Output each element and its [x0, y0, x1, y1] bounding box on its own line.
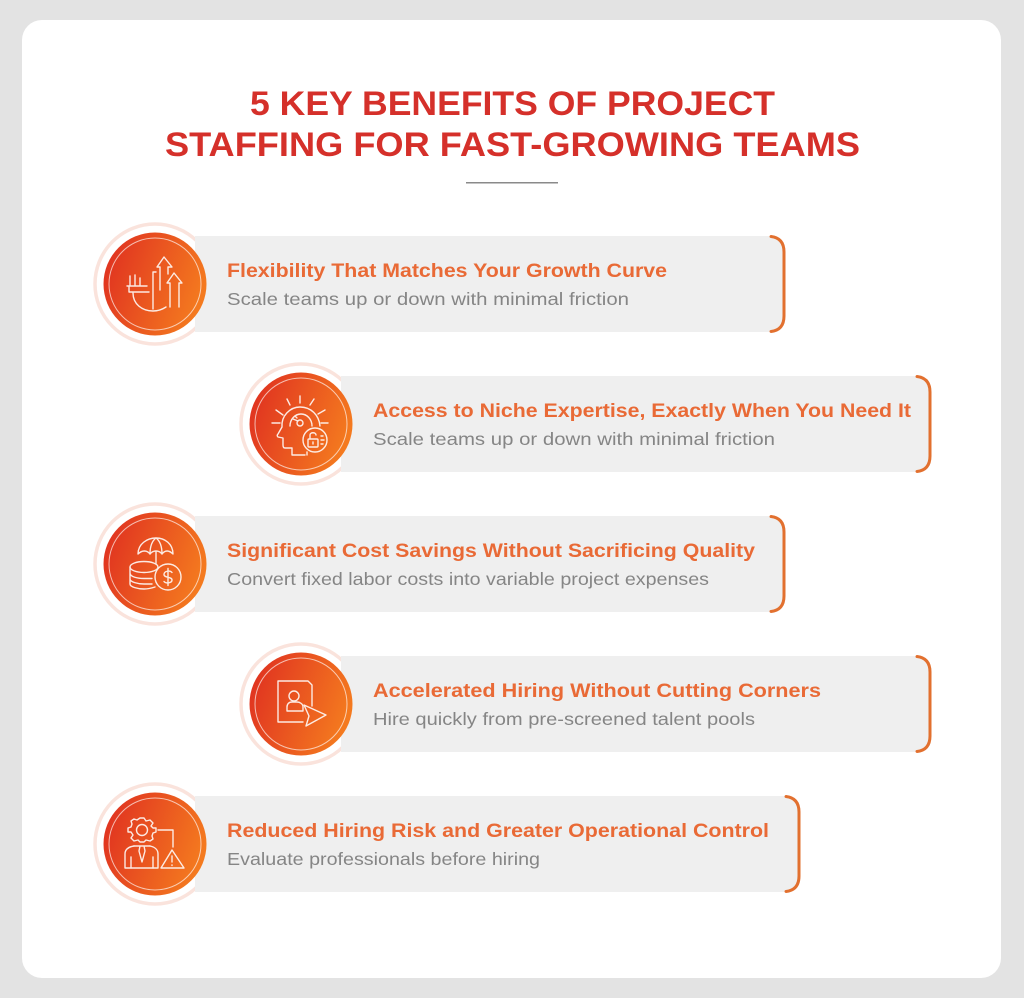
description: Convert fixed labor costs into variable project expenses: [227, 569, 709, 589]
description: Hire quickly from pre-screened talent pools: [373, 709, 755, 729]
panel: flexibility: [95, 224, 784, 344]
panel: accelerated hiring: [241, 644, 930, 764]
title: [165, 85, 860, 164]
description: Scale teams up or down with minimal friction: [373, 429, 775, 449]
heading: Accelerated Hiring Without Cutting Corners: [373, 681, 821, 702]
icon: growth arrows: [104, 232, 206, 336]
icon: umbrella and coins: [104, 512, 206, 616]
panel: reduced risk: [95, 784, 799, 904]
heading: Reduced Hiring Risk and Greater Operational Control: [227, 821, 769, 842]
panel: niche expertise: [241, 364, 930, 484]
heading: Significant Cost Savings Without Sacrificing Quality: [227, 541, 755, 562]
icon: head with gauge and lock: [250, 372, 352, 476]
title: 5 KEY BENEFITS OF PROJECT: [250, 85, 775, 123]
description: Scale teams up or down with minimal friction: [227, 289, 629, 309]
panel: cost savings: [95, 504, 784, 624]
title: STAFFING FOR FAST-GROWING TEAMS: [165, 126, 860, 164]
heading: Access to Niche Expertise, Exactly When You Need It: [373, 401, 912, 422]
heading: Flexibility That Matches Your Growth Curve: [227, 261, 667, 282]
description: Evaluate professionals before hiring: [227, 849, 540, 869]
icon: person with gear and warning: [104, 792, 206, 896]
icon: profile document with send arrow: [250, 652, 352, 756]
